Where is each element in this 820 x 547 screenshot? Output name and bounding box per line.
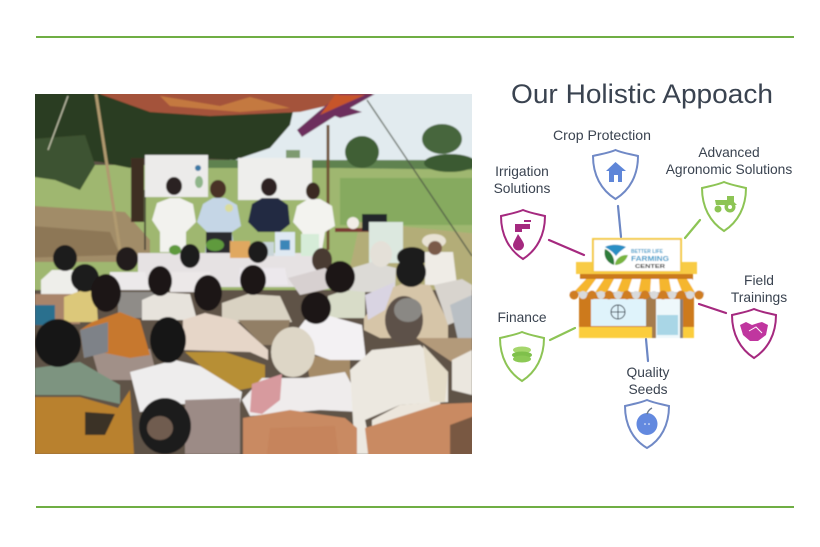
audience: white shirt man <box>288 316 366 360</box>
audience: front chairs <box>242 409 358 454</box>
photo: farmers meeting under canopy <box>35 94 472 454</box>
label: irrigation solutions: Solutions <box>494 181 550 196</box>
connector lines <box>549 206 726 361</box>
right table and poster <box>335 228 371 232</box>
awning scallops <box>570 290 704 300</box>
label: advanced agronomic solutions: Agronomic Solutions <box>666 162 792 177</box>
audience: striped shirt man <box>183 313 268 360</box>
icon: cross logo in window <box>611 305 625 319</box>
canopy fabric <box>99 94 372 118</box>
label: crop protection: Crop Protection <box>553 128 651 143</box>
sign text: BETTER LIFE <box>631 249 663 255</box>
audience: orange shirt man <box>80 312 150 358</box>
field <box>20 165 490 290</box>
audience: back rows <box>41 270 78 296</box>
awning stripes <box>569 279 704 294</box>
label: quality seeds: Seeds <box>628 382 668 397</box>
label: quality seeds: Quality <box>627 365 670 380</box>
icon: crop protection shield <box>593 150 638 199</box>
poles and ropes <box>96 94 120 250</box>
shop: Better Life Farming Center <box>569 239 704 338</box>
label: field trainings: Field <box>744 273 774 288</box>
sign text: FARMING <box>631 256 670 263</box>
label: irrigation solutions: Irrigation <box>495 164 549 179</box>
shop body <box>579 295 694 338</box>
audience: middle row <box>35 294 80 324</box>
sky <box>230 94 472 162</box>
title: Our Holistic Appoach <box>511 79 773 109</box>
icon: agronomic solutions shield <box>702 182 746 231</box>
audience: centre man <box>130 360 242 412</box>
label: advanced agronomic solutions: Advanced <box>698 145 760 160</box>
shop sign <box>593 239 681 272</box>
tree canopy <box>35 94 294 169</box>
label: field trainings: Trainings <box>731 290 787 305</box>
audience: front-left man <box>35 362 120 404</box>
label: finance: Finance <box>497 310 547 325</box>
sign text <box>631 249 670 270</box>
awning fascia <box>576 262 697 274</box>
icon: quality seeds shield <box>625 400 669 448</box>
white boards <box>145 155 208 197</box>
diagram: holistic approach <box>494 128 792 448</box>
icon: logo leaves <box>604 245 628 265</box>
audience: foreground head <box>139 398 191 454</box>
display table <box>138 253 320 287</box>
distant trees <box>205 160 490 170</box>
presenters <box>152 198 196 252</box>
sign text: CENTER <box>635 264 665 270</box>
ground <box>35 206 150 262</box>
icon: finance shield <box>500 332 544 381</box>
audience: white-haired man <box>242 372 362 416</box>
audience: grey-haired man <box>350 345 448 454</box>
icon: field trainings shield <box>732 309 776 358</box>
icon: irrigation shield <box>501 210 545 259</box>
audience: chairs <box>92 349 158 380</box>
